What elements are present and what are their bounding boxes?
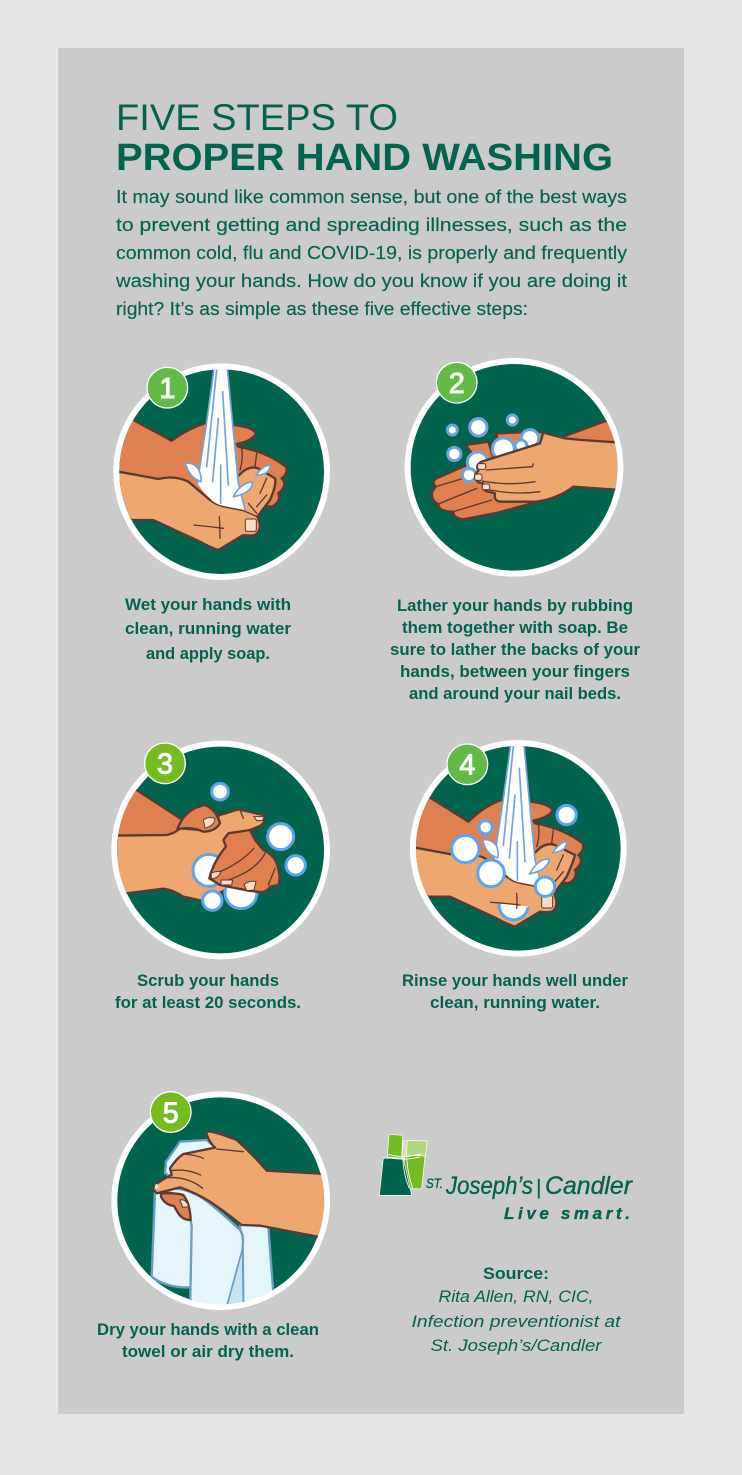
bubbles xyxy=(452,805,576,896)
dark front hand xyxy=(209,830,280,892)
finger creases xyxy=(168,1149,243,1188)
step 3 caption: for at least 20 seconds. xyxy=(115,994,301,1012)
intro paragraph: to prevent getting and spreading illnesses, such as the xyxy=(116,215,627,235)
towel back panel xyxy=(152,1190,193,1287)
step 2 caption xyxy=(390,597,641,703)
logo: St. Joseph's/Candler xyxy=(379,1134,634,1223)
finger creases xyxy=(220,810,275,885)
back hand xyxy=(410,793,583,883)
step 3 caption: Scrub your hands xyxy=(137,972,279,990)
step 3 caption xyxy=(115,972,301,1012)
source credit xyxy=(412,1265,622,1355)
top finger creases xyxy=(482,464,540,493)
source credit: Infection preventionist at xyxy=(412,1313,622,1331)
water edges xyxy=(494,745,542,886)
front hand xyxy=(410,844,575,927)
thumb nail xyxy=(542,896,553,908)
thumb nail xyxy=(203,817,215,828)
dark arm xyxy=(117,788,182,844)
badge 1 xyxy=(147,367,188,408)
lower hand fingers xyxy=(432,442,538,519)
source credit: St. Joseph’s/Candler xyxy=(430,1337,603,1355)
bubbles behind hands xyxy=(212,783,305,875)
background panel xyxy=(58,48,684,1414)
thumb nail xyxy=(180,1200,189,1207)
water edges xyxy=(197,368,245,509)
water stream xyxy=(197,367,245,510)
badge 5: 5 xyxy=(163,1097,179,1129)
badge 3 xyxy=(145,743,185,784)
water lines xyxy=(207,370,228,503)
finger nails xyxy=(475,464,490,490)
source credit: Rita Allen, RN, CIC, xyxy=(438,1288,594,1306)
logo wordmark: | xyxy=(536,1177,541,1199)
logo wordmark: Joseph’s xyxy=(445,1172,533,1200)
step 5 caption xyxy=(97,1321,319,1361)
intro paragraph: It may sound like common sense, but one of the best ways xyxy=(116,187,627,207)
logo wordmark xyxy=(426,1172,634,1223)
badge 4 xyxy=(447,744,488,785)
step 2 caption: them together with soap. Be xyxy=(402,619,628,637)
finger nail xyxy=(155,1184,158,1189)
step 4 caption: clean, running water. xyxy=(430,994,600,1012)
step 4 caption xyxy=(402,972,629,1012)
intro paragraph: right? It’s as simple as these five effective steps: xyxy=(116,299,528,319)
front hand xyxy=(113,467,275,550)
logo mark xyxy=(379,1134,427,1195)
step 5 caption: towel or air dry them. xyxy=(122,1343,294,1361)
lower bubble arc xyxy=(500,904,528,918)
thumb top line xyxy=(210,500,257,517)
droplets xyxy=(483,840,567,874)
source credit: Source: xyxy=(483,1265,549,1283)
intro paragraph: common cold, flu and COVID-19, is properly and frequently xyxy=(116,243,627,263)
top hand xyxy=(475,433,622,502)
intro paragraph xyxy=(115,187,627,319)
finger creases xyxy=(194,447,267,538)
dark fingers xyxy=(161,1193,191,1220)
logo wordmark: Candler xyxy=(545,1172,634,1200)
droplets xyxy=(185,463,270,497)
badge 1: 1 xyxy=(159,373,175,405)
badge 5 xyxy=(150,1092,191,1132)
thumb top line xyxy=(506,877,534,887)
lower bubbles xyxy=(193,854,257,910)
step 1 caption: and apply soap. xyxy=(146,645,270,663)
step 2 caption: sure to lather the backs of your xyxy=(390,641,641,659)
badge 3: 3 xyxy=(157,749,173,781)
towel right panel xyxy=(240,1223,273,1310)
step 2 illustration xyxy=(408,361,622,574)
step 2 caption: hands, between your fingers xyxy=(400,663,630,681)
step 1 caption: Wet your hands with xyxy=(125,596,291,614)
water stream xyxy=(495,746,539,885)
step 2 caption: and around your nail beds. xyxy=(409,685,621,703)
logo wordmark: ST. xyxy=(426,1175,443,1191)
step 3 illustration xyxy=(110,743,327,956)
towel front panel xyxy=(159,1188,243,1313)
finger nails xyxy=(211,817,264,891)
badge 2: 2 xyxy=(449,368,465,400)
lower finger creases xyxy=(436,475,492,512)
back hand xyxy=(113,415,287,507)
step 5 caption: Dry your hands with a clean xyxy=(97,1321,319,1339)
towel top xyxy=(165,1140,218,1177)
badge 4: 4 xyxy=(459,750,475,782)
title xyxy=(116,97,613,179)
step 1 caption: clean, running water xyxy=(125,620,292,638)
title: PROPER HAND WASHING xyxy=(116,137,613,179)
step 5 illustration xyxy=(114,1092,327,1313)
curled thumb xyxy=(177,805,220,832)
creases xyxy=(491,823,563,908)
step 4 illustration xyxy=(410,743,624,954)
drying hand xyxy=(153,1131,327,1238)
light arm xyxy=(110,809,264,901)
thumb nail xyxy=(245,519,256,531)
step 1 illustration xyxy=(113,366,327,577)
water lines xyxy=(503,747,525,880)
bubbles xyxy=(447,415,539,482)
back arm and hand xyxy=(496,420,616,446)
intro paragraph: washing your hands. How do you know if you are doing it xyxy=(115,271,627,291)
title: FIVE STEPS TO xyxy=(116,97,398,138)
badge 2 xyxy=(436,362,477,403)
towel fold xyxy=(227,1248,243,1307)
step 1 caption xyxy=(125,596,292,663)
lower bubble outline xyxy=(499,903,528,920)
step 2 caption: Lather your hands by rubbing xyxy=(397,597,633,615)
logo wordmark: Live smart. xyxy=(504,1204,630,1223)
step 4 caption: Rinse your hands well under xyxy=(402,972,629,990)
